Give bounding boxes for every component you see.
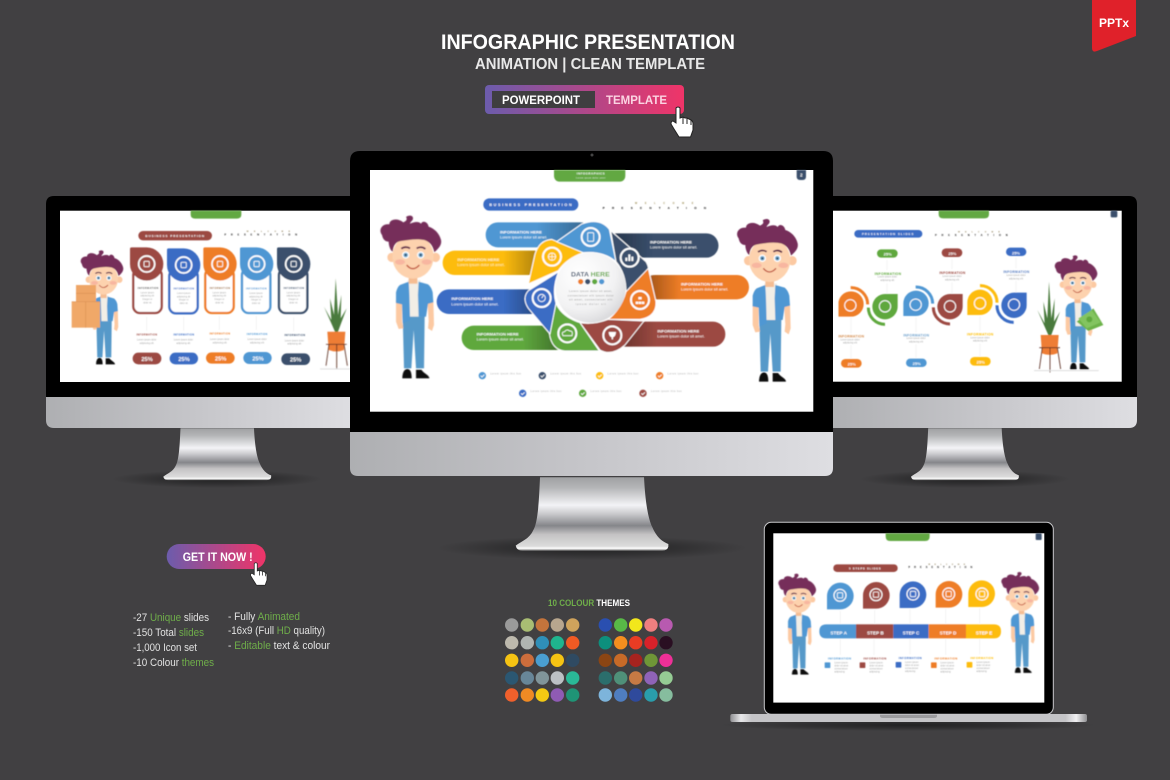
green tab [191,211,241,219]
title: INFOGRAPHIC PRESENTATION [441,31,735,54]
step 6 blue: adipiscing elit [1009,277,1023,280]
green tab: INFOGRAPHICS [577,172,605,176]
colour themes heading: 10 COLOUR THEMES [548,598,630,609]
card 1: INFORMATION [138,287,159,290]
bar: red: Lorem ipsum dolor sit amet. [657,334,705,338]
center monitor bezel [350,151,833,432]
card 4: INFORMATION [247,333,268,336]
welcome text [224,231,297,236]
info E [967,656,993,673]
card 5: dolor sit [289,301,298,304]
step 3 light blue: adipiscing elit [909,340,923,343]
icon: hand cursor on top button [671,107,693,137]
right monitor [830,196,1137,480]
info B: adipiscing [869,671,880,673]
bar: blue: Lorem ipsum dolor sit amet. [451,302,499,306]
step 3 light blue: Lorem ipsum dolor [906,337,926,340]
check item: blue: Lorem ipsum this box [531,390,562,393]
card 1: Lorem ipsum dolor [137,339,157,342]
card 4: INFORMATION [246,288,267,291]
teardrop B [863,582,890,609]
info D: Lorem ipsum [940,661,954,664]
feature list right: - Fully Animated [228,611,300,623]
check item: navy [539,372,582,379]
step 1 orange: adipiscing elit [843,341,857,344]
info B: dolor sit amet [869,664,884,667]
card 4: 25% [252,356,264,362]
icon: tablet [582,228,600,246]
laptop screen [773,533,1044,703]
ribbon: PPTx badge: PPTx [1099,18,1130,30]
step 6 blue: 25% [1012,250,1020,255]
right monitor stand [911,428,1019,480]
bar: navy [614,233,718,258]
info D: adipiscing [940,671,951,673]
info A [825,657,851,673]
card 1 [130,247,163,364]
step 1 orange: Lorem ipsum dolor [840,338,860,341]
check item: orange: Lorem ipsum this box [668,372,699,375]
radial petals [525,222,656,352]
button: PowerPoint Template [485,85,684,114]
card 3: Lorem ipsum [213,291,226,294]
info C: consectetuer [905,667,919,670]
bar: navy: Lorem ipsum dolor sit amet. [650,246,697,250]
check item: yellow: Lorem ipsum this box [608,372,639,375]
info B: consectetuer [869,667,883,670]
icon: globe [543,248,561,266]
welcome text [908,564,973,569]
step 4 red: 25% [948,251,957,256]
plant [1037,282,1061,372]
info C: INFORMATION [899,656,922,660]
feature list left: -1,000 Icon set [133,642,197,654]
left monitor chin [46,396,352,428]
info C: Lorem ipsum [905,661,919,664]
card 1: dolor sit [143,301,152,304]
card 1: 25% [141,357,153,363]
card 3 [203,247,237,364]
left monitor stand [163,428,271,480]
info A: INFORMATION [828,657,851,661]
step 2 green [868,249,902,324]
card 2: INFORMATION [173,333,194,336]
center data circle [556,253,626,323]
info E: adipiscing [976,671,987,673]
stand shadows [112,470,1096,731]
step bar: STEP E [976,630,992,635]
bar: yellow: INFORMATION HERE [457,257,500,262]
bar: red: INFORMATION HERE [657,328,700,333]
slide pill heading: BUSINESS PRESENTATION [145,234,204,238]
card 3: dolor sit [215,301,224,304]
step 6 blue [997,248,1030,322]
welcome text [603,203,706,210]
step 4 red [933,248,966,324]
check item: yellow [596,372,639,379]
petal: red [580,319,644,352]
bar: blue: INFORMATION HERE [451,296,494,301]
step 5 yellow: 25% [977,359,985,364]
card 2 [167,248,200,364]
laptop base [730,714,1087,722]
card 1: adipiscing dir [141,295,154,298]
step 5 yellow: INFORMATION [967,332,994,336]
icon: trophy [603,326,621,344]
welcome text: WELCOME [958,231,1000,233]
page tag [1111,211,1117,217]
button: PowerPoint Template: TEMPLATE [606,93,667,107]
bar: yellow [443,251,549,275]
left character [778,574,816,675]
left slide content [72,211,350,369]
check item: red [639,390,682,397]
left character [380,216,441,378]
check item: blue [519,390,562,397]
connector lines [840,608,980,655]
check list [479,372,699,397]
card 4: Lorem ipsum [249,292,263,295]
icon: dial [533,289,551,307]
card 2: adipiscing elit [176,342,191,345]
petal: blue [525,272,559,334]
icon: cloud [558,324,576,342]
center data circle: consectetuer elit ipsum dolor [568,293,614,297]
button: Get it now [167,544,266,569]
check item: orange [656,372,699,379]
button: Get it now: GET IT NOW ! [183,550,253,564]
info A: adipiscing [834,671,845,673]
bar: green: INFORMATION HERE [477,332,519,337]
step 6 blue: INFORMATION [1003,270,1030,274]
check item: light blue [479,372,522,379]
check item: navy: Lorem ipsum this box [550,372,582,375]
welcome text: PRESENTATION [224,232,297,236]
title [441,31,735,73]
info D: consectetuer [940,667,954,670]
bar: orange: INFORMATION HERE [681,281,723,286]
laptop [730,522,1087,722]
icon: hand cursor on get it now [250,563,267,585]
info B [860,657,886,673]
welcome text [935,231,1008,237]
center data circle: ipsum dolor sit [576,302,606,306]
teardrop A [827,583,854,609]
info E: INFORMATION [970,656,993,660]
feature list left: -27 Unique slides [133,612,209,624]
left monitor [46,196,352,480]
center data circle: Lorem ipsum dolor sit amet, [569,289,612,293]
card 4: adipiscing elit [250,341,264,344]
right monitor bezel [830,196,1137,397]
petal: orange [608,268,656,319]
info B: INFORMATION [863,657,886,661]
step 1 orange: INFORMATION [838,334,865,338]
teardrop C [900,581,926,608]
colour swatches left [505,618,579,702]
slide pill heading [854,230,922,238]
welcome text: WELCOME [247,231,291,233]
slide pill heading [138,231,212,240]
slide pill heading: PRESENTATION SLIDES [862,232,913,236]
character with boxes [72,250,123,364]
card 5 [277,247,310,365]
card 5: INFORMATION [284,334,305,337]
bar: orange: Lorem ipsum dolor sit amet. [681,287,728,291]
check item: green: Lorem ipsum this box [591,390,622,393]
slide pill heading: 5 STEPS SLIDES [849,567,881,571]
page number tag [797,170,806,180]
card 3: adipiscing elit [213,341,227,344]
card 5: Lorem ipsum [287,291,300,294]
page tag [1036,533,1042,540]
card 5: 25% [290,358,301,364]
step bar: STEP C [903,630,920,635]
info C [896,656,922,673]
card 1: adipiscing elit [140,342,154,345]
right character [1001,572,1039,673]
icon: chart [621,249,639,267]
laptop slide content [778,533,1042,675]
petal: navy [611,231,649,292]
page number tag: 2 [800,173,803,178]
card 5: INFORMATION [283,287,304,290]
card 4 [240,247,273,364]
step 5 yellow: Lorem ipsum dolor [970,336,990,339]
center monitor screen [370,170,813,412]
card 2: Lorem ipsum dolor [174,339,193,342]
step 2 green: adipiscing elit [880,279,895,282]
card 1: Lorem ipsum [141,291,154,294]
feature list right: - Editable text & colour [228,640,330,652]
card 5: adipiscing elit [287,343,302,346]
icon rings [533,228,649,344]
card 5: Lorem ipsum dolor [285,339,304,342]
center monitor [350,151,833,551]
card 2: Integer et [179,299,189,302]
feature list left [133,612,214,669]
teardrop E [968,580,995,607]
welcome text: PRESENTATION [603,206,706,210]
slide pill heading [483,198,578,211]
card 2: 25% [178,357,190,363]
laptop lid [764,522,1053,714]
bar: blue [437,289,543,314]
bar: green: Lorem ipsum dolor sit amet. [477,338,524,342]
bar: green [462,326,568,350]
right slide content [838,211,1117,372]
step 6 blue: Lorem ipsum dolor [1006,274,1026,277]
card 3: adipiscing dir [213,295,226,298]
ribbon: PPTx badge [1092,0,1136,52]
step 1 orange: 25% [848,361,856,366]
check item: red: Lorem ipsum this box [651,390,682,393]
bar: navy: INFORMATION HERE [650,239,692,244]
step 2 green: 25% [884,252,892,257]
card 2: adipiscing dir [177,295,191,298]
right character [737,219,798,382]
left monitor bezel [46,196,352,397]
info C: dolor sit amet [905,664,919,667]
step 3 light blue: INFORMATION [903,333,930,337]
card 4: Integer et [251,299,261,302]
welcome text: WELCOME [928,564,966,566]
info E: Lorem ipsum [976,661,990,664]
step bar: STEP A [830,630,848,635]
card 2: INFORMATION [173,288,194,291]
info A: Lorem ipsum [834,661,848,664]
info A: consectetuer [834,667,848,670]
camera [590,154,594,156]
bar: light blue [486,222,592,247]
green tab: Lorem ipsum dolor amet [576,176,606,179]
card 4: adipiscing dir [249,295,263,298]
card 3: INFORMATION [209,333,230,336]
feature list right [228,611,330,652]
step 4 red: INFORMATION [939,271,966,275]
left monitor screen [60,211,351,382]
colour swatches right [599,618,673,702]
card 4: dolor sit [252,302,260,305]
info D [931,657,957,673]
character with money [1034,255,1103,371]
step 1 orange [838,288,868,368]
info E: consectetuer [976,667,990,670]
step bar: STEP B [867,630,884,635]
center monitor chin [350,431,833,476]
bar: orange [643,275,749,299]
step 5 yellow [967,286,997,366]
card 3: INFORMATION [209,287,230,290]
bar: red [603,322,725,347]
plant [320,278,350,369]
icon: org [631,291,649,309]
slide pill heading [833,564,898,572]
info B: Lorem ipsum [869,661,883,664]
title: ANIMATION | CLEAN TEMPLATE [475,56,705,73]
info D: dolor sit amet [940,664,955,667]
teardrop D [936,581,962,608]
right monitor screen [830,211,1122,382]
feature list right: -16x9 (Full HD quality) [228,625,325,637]
card 3: Integer et [214,298,225,301]
step 3 light blue [903,287,933,367]
card 4: Lorem ipsum dolor [247,338,267,341]
card 3: Lorem ipsum dolor [210,338,230,341]
feature list left: -150 Total slides [133,627,204,639]
check item: light blue: Lorem ipsum this box [490,372,522,375]
slide pill heading: BUSINESS PRESENTATION [489,203,572,207]
info C: adipiscing [905,671,916,673]
welcome text: WELCOME [635,203,694,205]
center data circle: sit amet, consectetuer elit [569,298,612,302]
step 3 light blue: 25% [913,361,921,366]
step 4 red: adipiscing elit [945,278,959,281]
right monitor chin [830,396,1137,428]
center slide content [380,170,806,397]
bar: light blue: Lorem ipsum dolor sit amet. [500,235,547,239]
step 2 green: Lorem ipsum dolor [878,276,897,279]
green tab [554,170,625,182]
step 4 red: Lorem ipsum dolor [942,275,962,278]
card 3: 25% [215,356,226,362]
step bar: STEP D [940,630,957,635]
green tab [886,533,930,541]
petal: green [549,303,599,351]
card 1: INFORMATION [136,333,157,336]
welcome text: PRESENTATION [908,566,973,569]
petal: light blue [557,222,616,262]
check item: green [579,390,622,397]
feature list left: -10 Colour themes [133,657,214,669]
card 5: Integer et [288,298,299,301]
card 2: dolor sit [180,302,188,305]
step 5 yellow: adipiscing elit [973,340,987,343]
info D: INFORMATION [934,657,957,661]
petal: yellow [528,239,583,284]
green tab [939,211,989,218]
center data circle: DATA HERE [571,272,610,279]
card 1: Integer et [142,298,153,301]
card 2: Lorem ipsum [177,292,190,295]
card 5: adipiscing dir [287,295,300,298]
info A: dolor sit amet [834,664,849,667]
step bar [819,624,1001,638]
bar: light blue: INFORMATION HERE [500,229,542,234]
welcome text: PRESENTATION [935,233,1008,237]
info E: dolor sit amet [976,664,991,667]
step 2 green: INFORMATION [875,272,902,276]
bar: yellow: Lorem ipsum dolor sit amet. [457,263,505,267]
button: PowerPoint Template: POWERPOINT [502,93,581,107]
center monitor stand [516,477,668,551]
